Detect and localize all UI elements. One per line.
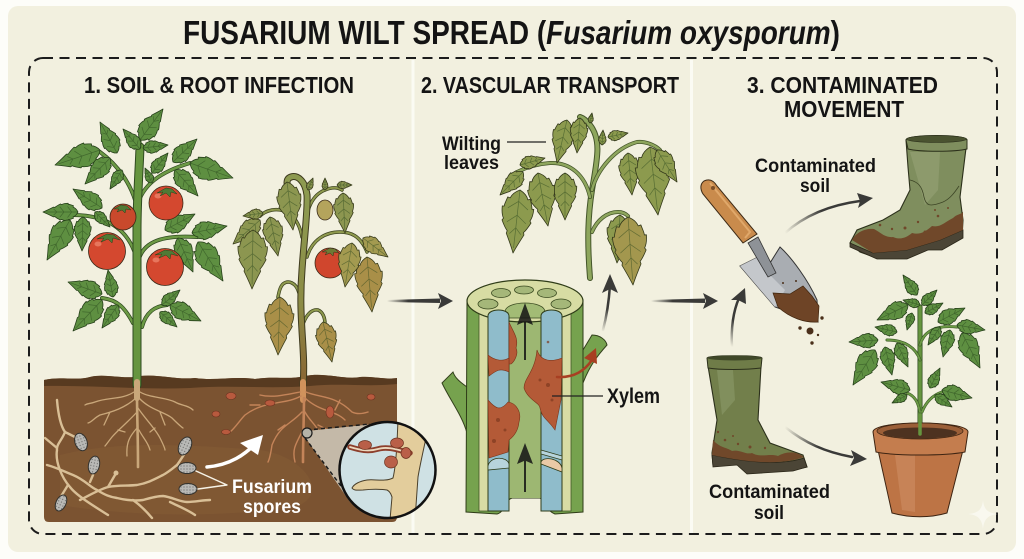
- tomatoes: [88, 186, 184, 286]
- label: fusarium spores: [196, 471, 312, 518]
- fusarium spores: [53, 431, 197, 513]
- arrow: panel 1 to panel 2: [387, 293, 453, 309]
- label: fusarium spores: Fusarium: [232, 477, 312, 498]
- white arrow to infected roots: [207, 435, 263, 467]
- stem over pot soil: [918, 415, 922, 434]
- healthy leaves: [37, 103, 237, 338]
- panel separators: [412, 60, 693, 535]
- infected roots: [230, 382, 368, 462]
- young plant stems: [887, 307, 957, 434]
- magnified root inset: [302, 420, 436, 520]
- lower vessel openings: [488, 450, 562, 472]
- wilted stems: [260, 188, 367, 327]
- side branches: [442, 335, 607, 433]
- heading: vascular transport: 2. VASCULAR TRANSPORT: [421, 72, 679, 98]
- wilting plant leaves: [494, 112, 685, 286]
- heading: contaminated movement: [747, 72, 938, 122]
- healthy stems: [73, 135, 197, 385]
- icon: terracotta pot: [873, 423, 968, 517]
- young plant leaves: [844, 272, 989, 411]
- infected root lesions: [212, 392, 375, 434]
- heading: contaminated movement: 3. CONTAMINATED: [747, 72, 938, 98]
- upward flow arrows: [517, 303, 533, 492]
- label: contaminated soil, bottom: [709, 482, 830, 524]
- wilting plant stems: [517, 117, 660, 278]
- icon: trowel: [701, 180, 824, 345]
- icon: watermark sparkle: [968, 500, 998, 529]
- red spread arrow: [557, 348, 597, 377]
- panel: vascular transport: [421, 72, 685, 514]
- wilted leaves: [227, 177, 393, 364]
- healthy roots: [85, 382, 193, 467]
- label: contaminated soil, top: [755, 156, 876, 197]
- panel: soil and root infection: [37, 72, 998, 529]
- title: FUSARIUM WILT SPREAD (Fusarium oxysporum): [183, 14, 840, 51]
- fungal hyphae: [45, 400, 210, 518]
- panel: contaminated movement: [701, 72, 989, 524]
- wilted tomatoes: [315, 200, 345, 278]
- label: contaminated soil, top: soil: [800, 176, 830, 197]
- label: xylem: [552, 385, 660, 408]
- label: contaminated soil, bottom: Contaminated: [709, 482, 830, 503]
- label: xylem: Xylem: [607, 385, 660, 408]
- label: contaminated soil, bottom: soil: [754, 503, 784, 524]
- label: wilting leaves: Wilting: [442, 134, 501, 155]
- cross-section top: [467, 280, 583, 322]
- wilting plant: [494, 112, 685, 286]
- arrow: panel 2 to panel 3: [651, 293, 718, 309]
- heading: soil and root infection: 1. SOIL & ROOT INFECTION: [84, 72, 354, 98]
- arrow: trowel to boot: [785, 193, 873, 233]
- xylem vessels: [488, 310, 562, 511]
- arrow: boot to pot: [785, 427, 867, 466]
- icon: boot with soil, lower left: [707, 356, 807, 474]
- stem body: [466, 281, 583, 514]
- icon: boot with soil, top right: [850, 136, 967, 259]
- young plant: [844, 272, 989, 434]
- arrow: boot to trowel: [731, 288, 746, 347]
- label: wilting leaves: leaves: [444, 153, 499, 174]
- label: fusarium spores: spores: [243, 497, 301, 518]
- arrow: stem section to plant: [602, 274, 618, 330]
- healthy tomato plant: [37, 103, 436, 520]
- stem wall layers: [479, 308, 571, 511]
- fungal blockage: [488, 322, 562, 458]
- stem cross-section: [442, 280, 607, 514]
- label: contaminated soil, top: Contaminated: [755, 156, 876, 177]
- heading: contaminated movement: MOVEMENT: [784, 96, 904, 122]
- wilted tomato plant: [212, 177, 393, 462]
- soil block: [44, 375, 397, 522]
- label: wilting leaves: [442, 134, 546, 174]
